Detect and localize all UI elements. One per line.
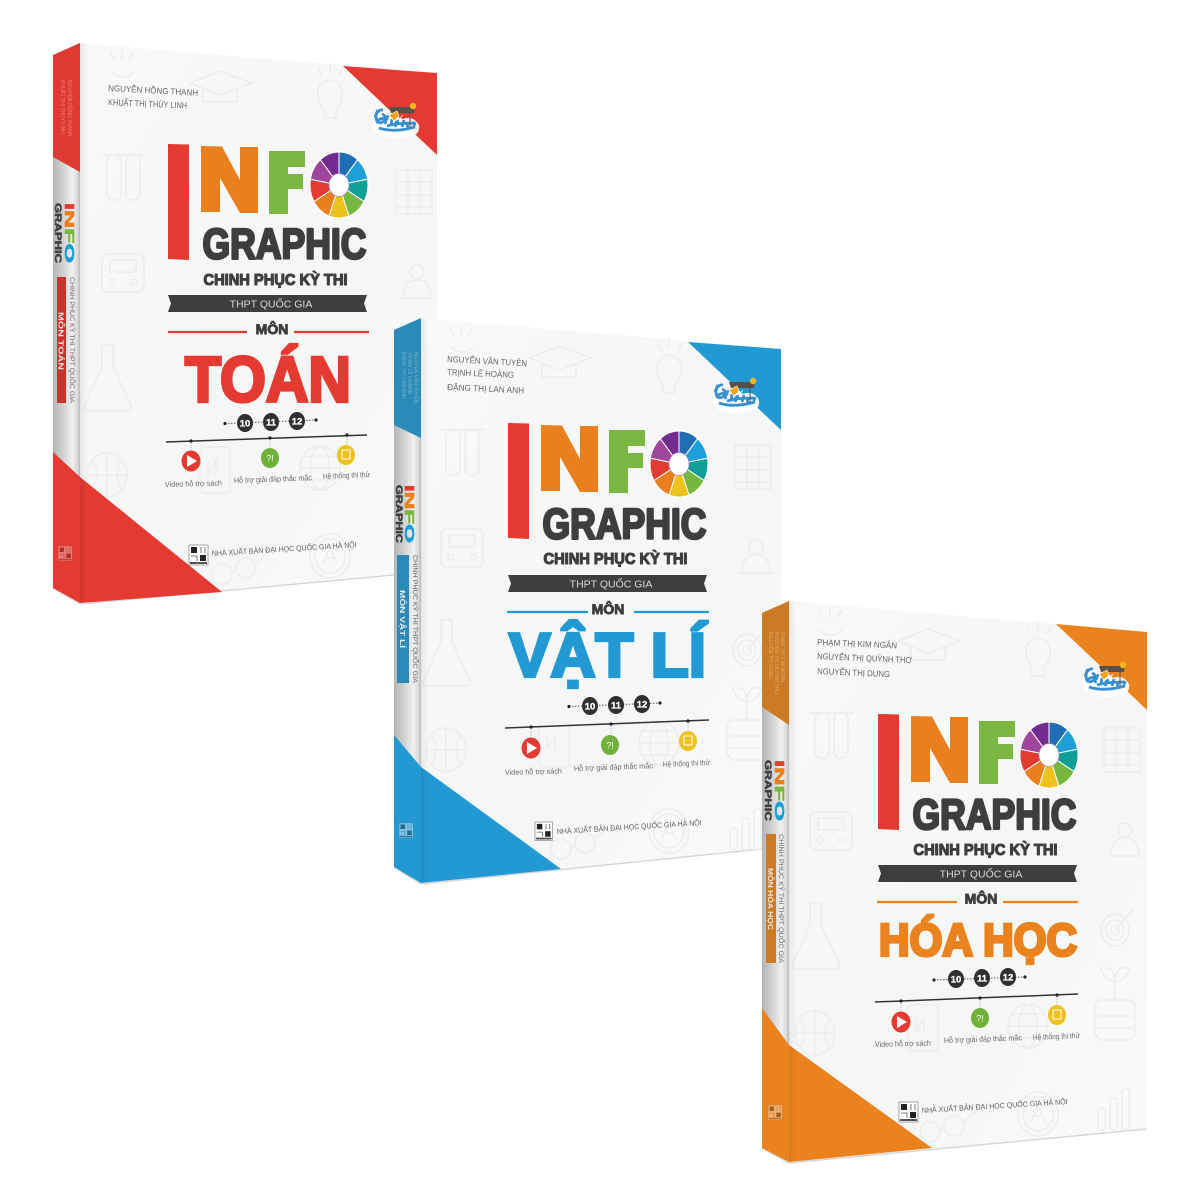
book hóa học: spine (762, 601, 789, 1162)
book toán: grade badges: 11 (266, 418, 277, 428)
book toán: spine: NGUYỄN HỒNG THANH (66, 80, 73, 137)
book toán: subject heading: MÔN (256, 320, 288, 337)
book toán: grade badges: 12 (292, 416, 302, 428)
book toán: timeline with feature icons (165, 433, 370, 489)
book vật lí: corner triangle top (688, 342, 781, 430)
book vật lí: authors: TRỊNH LÊ HOÀNG (447, 367, 515, 380)
book toán: authors (108, 82, 198, 110)
book hóa học: authors: PHẠM THỊ KIM NGÂN (817, 637, 897, 650)
book vật lí: front cover (421, 318, 781, 883)
book hóa học: hinge shading (789, 601, 797, 1162)
book hóa học: spine: NGUYỄN THỊ DUNG (767, 632, 774, 679)
book toán: corner triangle top (343, 66, 437, 155)
book toán: ground shadow (53, 571, 437, 604)
book vật lí: spine: NGUYỄN VĂN TUYÊN (412, 352, 420, 404)
book hóa học: spine: I N F O (772, 760, 787, 821)
book hóa học: INFO GRAPHIC title: CHINH PHỤC KỲ THI (914, 841, 1058, 859)
book toán: authors: NGUYỄN HỒNG THANH (108, 82, 198, 98)
book vật lí: timeline with feature icons: ?! (606, 740, 614, 750)
book hóa học: subject heading: MÔN (965, 890, 997, 906)
book toán: timeline with feature icons: Hỗ trợ giải đáp thắc mắc (234, 473, 312, 485)
book hóa học: corner triangle bottom (789, 1045, 932, 1162)
book hóa học: grade badges (932, 968, 1027, 988)
book toán: INFO GRAPHIC title: THPT QUỐC GIA (230, 296, 312, 310)
book hóa học: front cover (789, 601, 1147, 1162)
book hóa học: timeline with feature icons: Video hỗ trợ sách (875, 1039, 931, 1049)
book toán: front cover (80, 43, 437, 603)
book vật lí: authors: NGUYỄN VĂN TUYÊN (447, 353, 527, 368)
book toán: spine: I N F O (62, 203, 77, 263)
book vật lí: background line icons (424, 325, 773, 859)
book vật lí: publisher brand logo top (713, 378, 759, 413)
book toán: timeline with feature icons: Video hỗ trợ sách (165, 479, 222, 489)
book vật lí: grade badges: 11 (611, 700, 622, 712)
book vật lí: spine: CHINH PHỤC KỲ THI THPT QUỐC GIA (411, 555, 418, 684)
book toán: corner triangle bottom (80, 477, 222, 603)
book vật lí: grade badges (567, 695, 662, 715)
book toán: spine: CHINH PHỤC KỲ THI THPT QUỐC GIA (68, 277, 75, 404)
book hóa học: publisher: NHÀ XUẤT BẢN ĐẠI HỌC QUỐC GIA HÀ NỘI (922, 1096, 1068, 1115)
book hóa học: timeline with feature icons: ?! (976, 1014, 984, 1024)
book hóa học: spine: NGUYỄN THỊ QUỲNH THƠ (773, 632, 780, 695)
book toán: publisher brand logo top (373, 103, 419, 138)
book vật lí: grade badges: 10 (585, 702, 595, 712)
book hóa học: spine: MÔN HÓA HỌC (766, 868, 775, 931)
book vật lí: hinge shading (421, 318, 429, 883)
book vật lí: INFO GRAPHIC title: THPT QUỐC GIA (570, 576, 652, 590)
book vật lí: spine: TRỊNH LÊ HOÀNG (406, 352, 414, 395)
book hóa học: corner triangle top (1056, 624, 1147, 710)
book toán: INFO GRAPHIC title (168, 144, 369, 312)
book hóa học: publisher (899, 1096, 1068, 1122)
book hóa học: publisher brand logo top (1083, 662, 1129, 697)
book hóa học: spine: PHẠM THỊ KIM NGÂN (779, 632, 786, 682)
book toán: spine: MÔN TOÁN (56, 312, 66, 370)
book hóa học: authors: NGUYỄN THỊ DUNG (817, 665, 891, 679)
book toán: timeline with feature icons: ?! (266, 454, 274, 464)
book vật lí: timeline with feature icons: Video hỗ trợ sách (505, 767, 562, 777)
book vật lí: timeline with feature icons: Hỗ trợ giải đáp thắc mắc (574, 761, 653, 773)
book vật lí: timeline with feature icons (505, 719, 710, 777)
book vật lí: corner triangle bottom (421, 767, 561, 883)
book vật lí: publisher: NHÀ XUẤT BẢN ĐẠI HỌC QUỐC GIA HÀ NỘI (557, 817, 702, 836)
book toán: spine: GRAPHIC (53, 203, 63, 264)
book vật lí: subject heading: MÔN (592, 600, 624, 617)
book hóa học: subject heading (877, 890, 1078, 966)
book hóa học: timeline with feature icons (875, 993, 1080, 1049)
book vật lí: authors (447, 353, 527, 395)
book toán: subject heading: TOÁN (185, 344, 351, 416)
book toán: spine: KHUẤT THỊ THÙY LINH (59, 80, 66, 134)
book toán: publisher (189, 539, 357, 565)
book hóa học: grade badges: 12 (1003, 972, 1013, 984)
book vật lí: spine (394, 318, 421, 883)
panel: book hóa học (762, 601, 1147, 1163)
book hóa học: authors (817, 637, 913, 679)
book toán: publisher: NHÀ XUẤT BẢN ĐẠI HỌC QUỐC GIA HÀ NỘI (212, 539, 357, 558)
book hóa học: subject heading: HÓA HỌC (879, 914, 1077, 966)
book vật lí: ground shadow (394, 847, 781, 884)
panel: book toán (53, 43, 437, 604)
book vật lí: spine: MÔN VẬT LÍ (398, 590, 407, 649)
book vật lí: spine: GRAPHIC (394, 485, 404, 544)
book toán: timeline with feature icons: Hệ thống thi thử (323, 470, 370, 481)
book vật lí: timeline with feature icons: Hệ thống thi thử (663, 758, 710, 769)
book hóa học: grade badges: 10 (951, 974, 961, 986)
book vật lí: publisher (535, 817, 702, 840)
book hóa học: ground shadow (762, 1129, 1147, 1163)
book toán: INFO GRAPHIC title: GRAPHIC (202, 220, 366, 268)
book vật lí: authors: ĐẶNG THỊ LAN ANH (447, 382, 524, 395)
book toán: spine (53, 43, 80, 603)
book toán: INFO GRAPHIC title: CHINH PHỤC KỲ THI (204, 271, 348, 289)
book hóa học: background line icons (793, 608, 1142, 1142)
book vật lí: INFO GRAPHIC title (508, 423, 709, 592)
book hóa học: grade badges: 11 (977, 974, 988, 984)
book hóa học: timeline with feature icons: Hỗ trợ giải đáp thắc mắc (944, 1033, 1022, 1045)
book vật lí: spine: I N F O (402, 485, 417, 543)
book hóa học: timeline with feature icons: Hệ thống thi thử (1033, 1031, 1080, 1042)
book vật lí: INFO GRAPHIC title: GRAPHIC (542, 500, 706, 548)
book vật lí: grade badges: 12 (637, 700, 647, 710)
book hóa học: INFO GRAPHIC title: GRAPHIC (912, 791, 1076, 839)
book vật lí: subject heading: VẬT LÍ (509, 622, 708, 690)
book hóa học: authors: NGUYỄN THỊ QUỲNH THƠ (817, 650, 913, 665)
book hóa học: spine: CHINH PHỤC KỲ THI THPT QUỐC GIA (777, 834, 784, 964)
book toán: background line icons (85, 50, 434, 584)
book toán: grade badges: 10 (240, 418, 250, 430)
book vật lí: spine: ĐẶNG THỊ LAN ANH (400, 352, 407, 399)
book vật lí: INFO GRAPHIC title: CHINH PHỤC KỲ THI (544, 550, 688, 568)
book hóa học: spine: GRAPHIC (763, 760, 773, 822)
panel: book vật lí (394, 318, 781, 884)
book toán: hinge shading (80, 43, 88, 603)
book toán: authors: KHUẤT THỊ THÙY LINH (108, 97, 187, 110)
book toán: grade badges (223, 412, 318, 432)
book hóa học: INFO GRAPHIC title (878, 714, 1079, 882)
book toán: subject heading (168, 320, 369, 416)
book hóa học: INFO GRAPHIC title: THPT QUỐC GIA (940, 866, 1022, 880)
